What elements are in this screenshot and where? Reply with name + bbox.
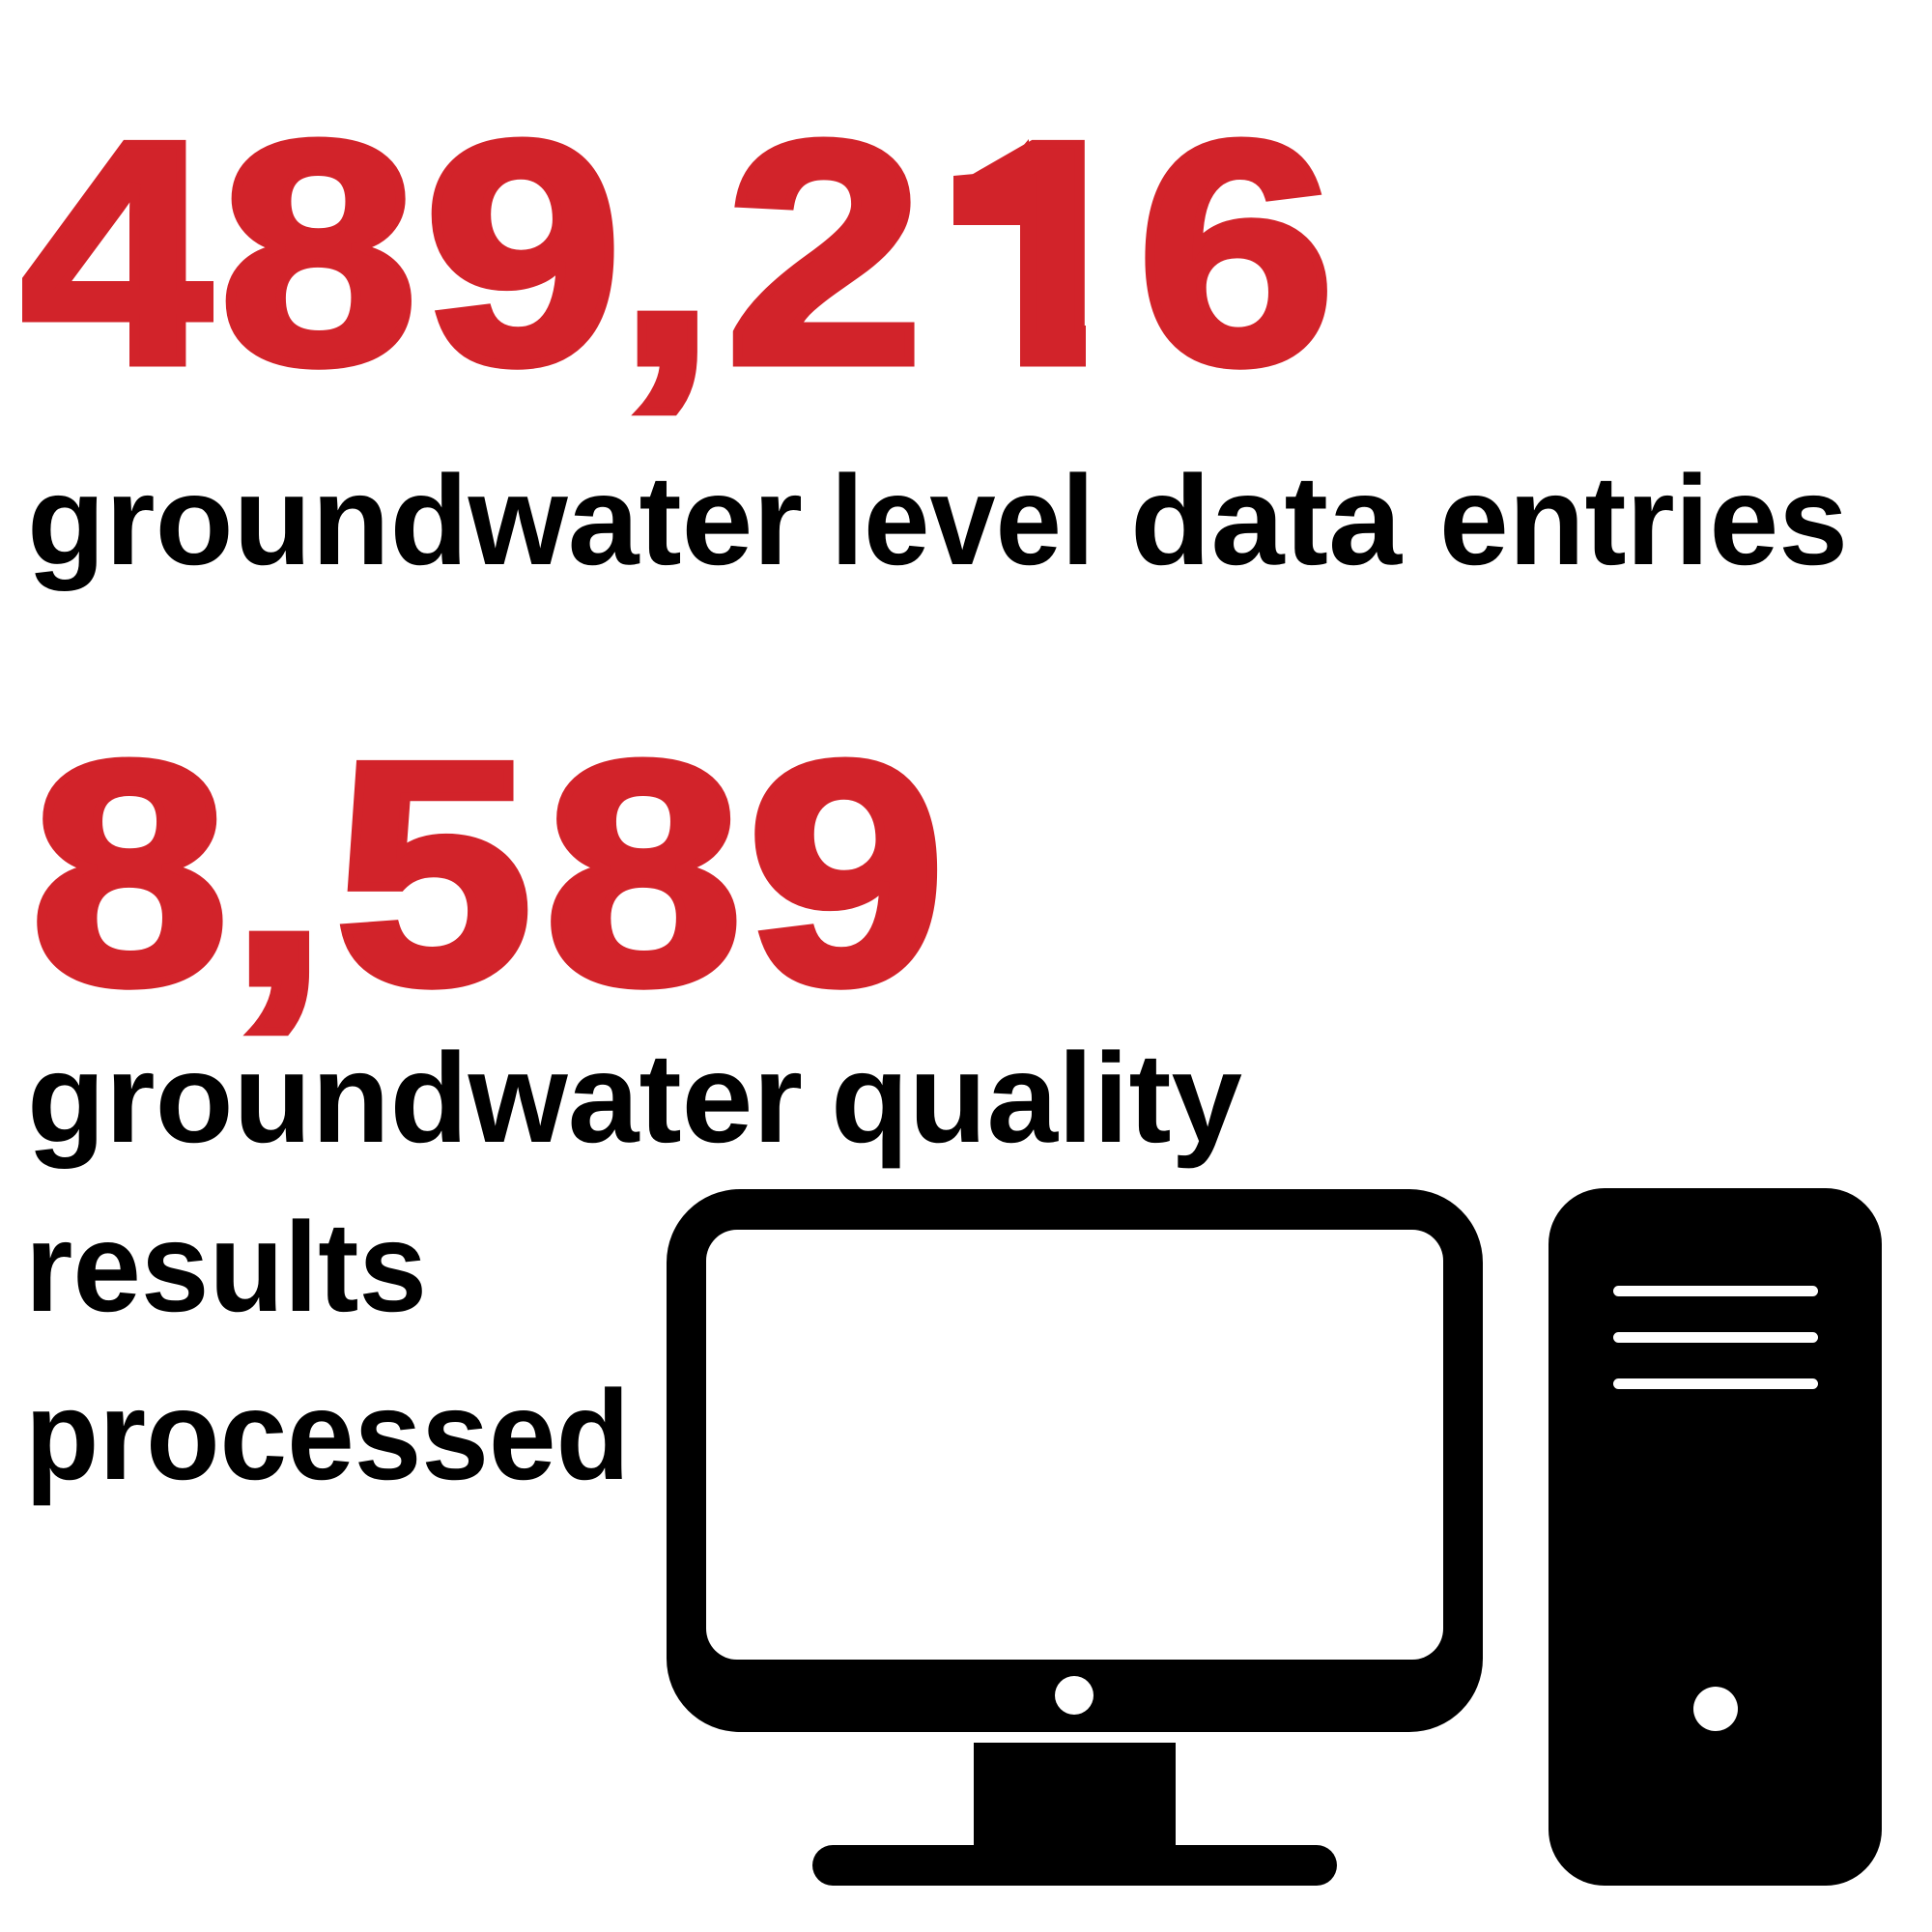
label: results: results	[25, 1196, 427, 1338]
statistic: 489,216: 489,216	[17, 75, 1335, 430]
label: groundwater level data entries: entries	[1439, 449, 1848, 591]
label: processed: processed	[25, 1364, 630, 1506]
label: groundwater level data entries	[27, 449, 1848, 591]
label: groundwater level data entries: groundwater	[27, 449, 803, 591]
label: groundwater quality: quality	[831, 1027, 1242, 1169]
label: groundwater level data entries: data	[1130, 449, 1404, 591]
label: groundwater quality: groundwater	[27, 1027, 803, 1169]
label: groundwater level data entries: level	[831, 449, 1094, 591]
statistic: 8,589: 8,589	[31, 696, 946, 1050]
label: groundwater quality	[27, 1027, 1242, 1169]
icon: desktop monitor	[667, 1189, 1483, 1886]
icon: computer tower	[1548, 1188, 1882, 1886]
